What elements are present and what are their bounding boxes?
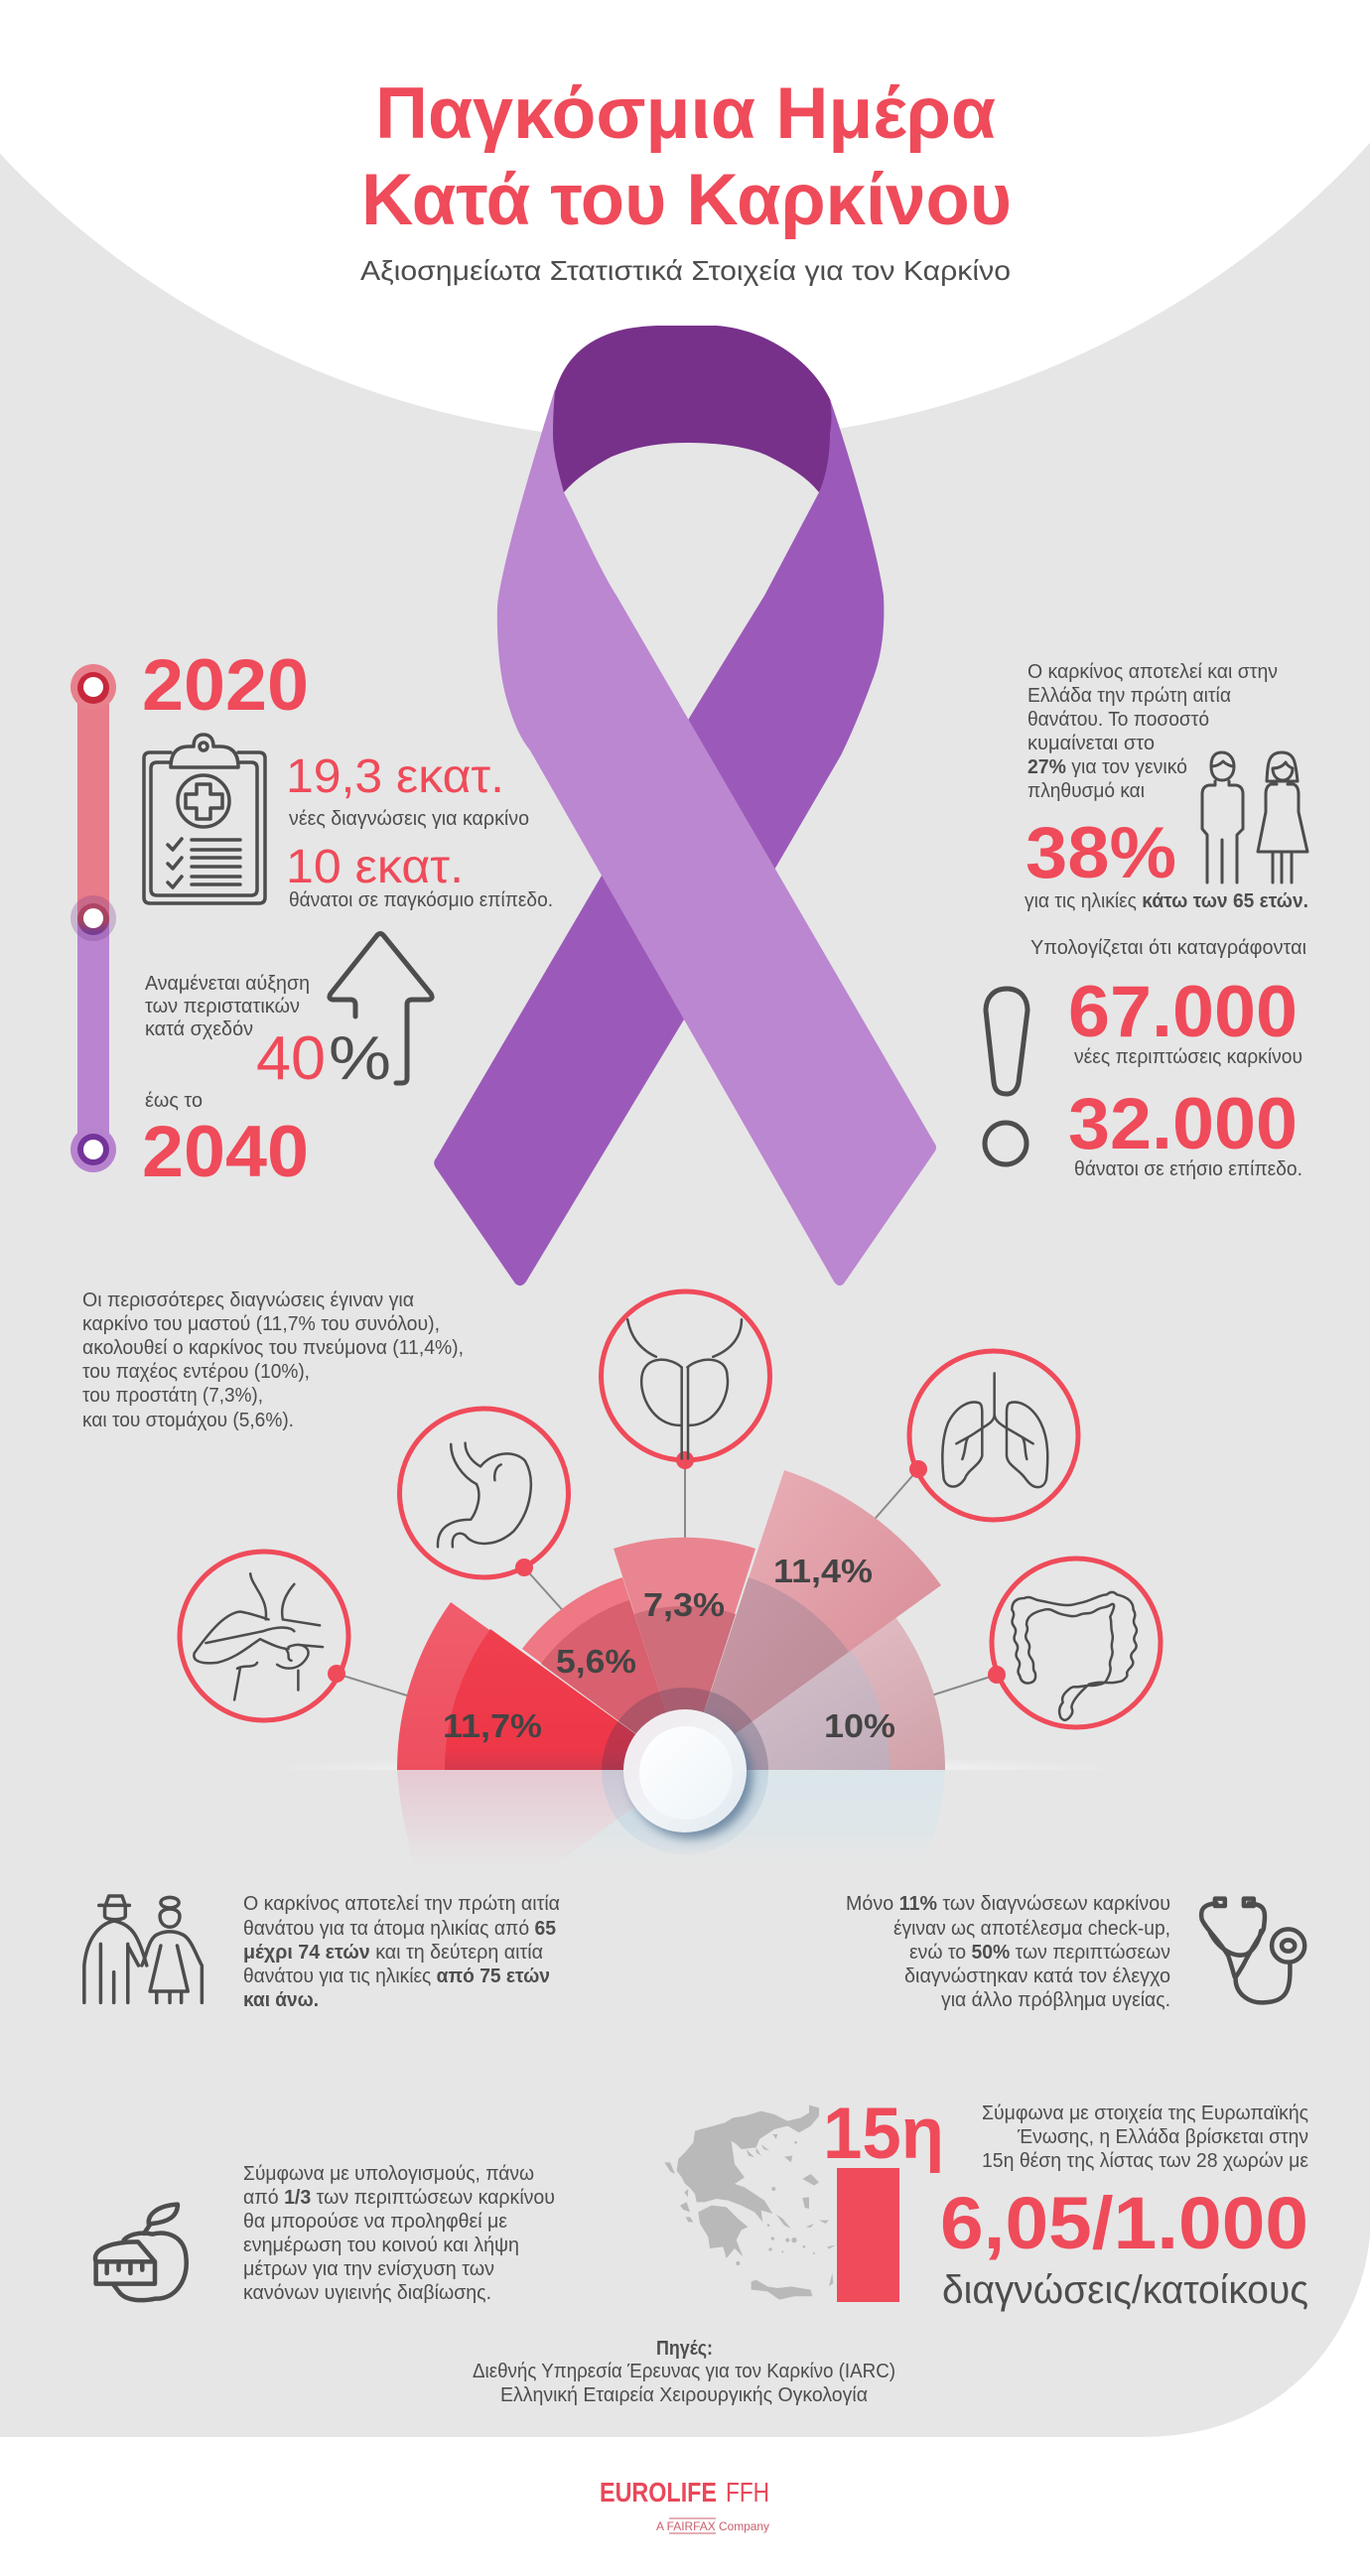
text: one third preventable: από 1/3 των περιπτώσεων καρκίνου [243,2187,555,2209]
text: first cause ages 65-74: Ο καρκίνος αποτελεί την πρώτη αιτία [243,1893,560,1915]
text: expected increase: Αναμένεται αύξηση [145,973,310,995]
title [361,73,1012,240]
stat: 10 million: θάνατοι σε παγκόσμιο επίπεδο. [289,889,553,911]
text: leading cause in Greece: 27% για τον γενικό [1028,756,1187,778]
stat: 19,3 million: νέες διαγνώσεις για καρκίνο [289,808,529,830]
icon: lungs [909,1351,1078,1520]
text: first cause ages 65-74: θανάτου για τα άτομα ηλικίας από 65 [243,1918,556,1940]
sources [473,2338,895,2406]
stat: 10 million [286,841,553,911]
sources: Διεθνής Υπηρεσία Έρευνας για τον Καρκίνο (IARC) [473,2361,895,2382]
sector: prostate 7,3% [614,1538,755,1770]
stat: 40 percent [256,1024,391,1093]
connector lines [337,1460,997,1696]
logo: Eurolife FFH: EUROLIFE [600,2477,717,2508]
stat: 6,05/1.000: 6,05/1.000 [940,2182,1308,2264]
text: one third preventable: κανόνων υγιεινής διαβίωσης. [243,2282,491,2304]
text: check-up share: για άλλο πρόβλημα υγείας. [941,1989,1170,2011]
fan reflection [397,1770,945,1866]
stat: 32.000: θάνατοι σε ετήσιο επίπεδο. [1074,1158,1302,1180]
text: until: έως το [145,1090,203,1112]
text: one third preventable: ενημέρωση του κοινού και λήψη [243,2235,519,2256]
text: most diagnoses: του προστάτη (7,3%), [82,1385,263,1407]
percent labels: 5,6% [556,1643,636,1680]
sector: lung 11,4% [685,1470,941,1770]
panel: check-up [846,1893,1304,2011]
percent labels: 11,7% [443,1707,542,1744]
text: one third preventable: θα μπορούσε να προληφθεί με [243,2211,507,2233]
year 2040: 2040 [142,1112,309,1192]
text: first cause ages 65-74: θανάτου για τις ηλικίες από 75 ετών [243,1966,550,1987]
text: leading cause in Greece: πληθυσμό και [1028,780,1145,802]
text: most diagnoses: καρκίνο του μαστού (11,7% του συνόλου), [82,1313,440,1335]
map of Greece [664,2105,836,2300]
text: check-up share [846,1893,1170,2011]
centre ring [602,1688,768,1854]
text: EU ranking: 15η θέση της λίστας των 28 χωρών με [982,2150,1308,2172]
logo: Eurolife FFH: FFH [726,2477,769,2508]
sector: stomach 5,6% [522,1577,685,1770]
stat: 67.000: νέες περιπτώσεις καρκίνου [1074,1046,1302,1068]
text: check-up share: Μόνο 11% των διαγνώσεων καρκίνου [846,1893,1170,1915]
panel: Greece mortality [1025,661,1308,912]
text: estimated: Υπολογίζεται ότι καταγράφονται [1030,937,1306,959]
text: expected increase: κατά σχεδόν [145,1018,253,1040]
logo: Eurolife FFH [600,2477,769,2533]
icon: up arrow [330,933,432,1083]
text: most diagnoses: και του στομάχου (5,6%). [82,1410,294,1431]
panel: timeline 2020-2040 [70,645,553,1192]
subtitle: Αξιοσημείωτα Στατιστικά Στοιχεία για τον Καρκίνο [360,255,1011,286]
percent labels: 10% [824,1707,895,1744]
text: expected increase [145,973,310,1040]
icon: man and woman [1202,752,1307,882]
icon: stethoscope [1201,1899,1304,2002]
text: leading cause in Greece: κυμαίνεται στο [1028,733,1155,754]
text: leading cause in Greece: θανάτου. Το ποσοστό [1028,709,1209,731]
logo: Eurolife FFH: A FAIRFAX Company [656,2519,769,2533]
text: one third preventable: μέτρων για την ενίσχυση των [243,2258,494,2280]
icon: clipboard [144,735,265,903]
text: under 65: για τις ηλικίες κάτω των 65 ετών. [1025,890,1308,912]
text: check-up share: ενώ το 50% των περιπτώσεων [909,1942,1170,1964]
timeline marker 2040 [70,1127,116,1172]
text: leading cause in Greece: Ελλάδα την πρώτη αιτία [1028,685,1231,707]
stat: 38 percent: 38% [1026,813,1176,893]
stat: 32.000: 32.000 [1068,1084,1298,1164]
panel: prevention [95,2163,555,2304]
year 2020: 2020 [142,645,309,726]
sector: colon 10% [685,1617,945,1770]
timeline bar [77,687,109,1150]
icon: exclamation mark [985,989,1028,1164]
icon: colon [988,1559,1161,1727]
text: expected increase: των περιστατικών [145,996,300,1017]
purple awareness ribbon [434,326,936,1286]
text: EU ranking: Σύμφωνα με στοιχεία της Ευρωπαϊκής [982,2102,1308,2124]
text: first cause ages 65-74: μέχρι 74 ετών και τη δεύτερη αιτία [243,1942,543,1964]
stat: 10 million: 10 εκατ. [286,841,464,893]
title: Κατά του Καρκίνου [361,160,1012,240]
percent labels [443,1553,895,1744]
text: most diagnoses: του παχέος εντέρου (10%), [82,1361,310,1383]
stat: 15th: 15η [823,2094,944,2174]
text: EU ranking: Ένωσης, η Ελλάδα βρίσκεται στην [1017,2126,1308,2148]
stat: 19,3 million [286,750,529,830]
sources: Ελληνική Εταιρεία Χειρουργικής Ογκολογία [500,2384,868,2406]
text: leading cause in Greece [1028,661,1278,802]
stat: 19,3 million: 19,3 εκατ. [286,750,504,803]
panel: yearly cases [985,937,1306,1180]
text: most diagnoses: Οι περισσότερες διαγνώσεις έγιναν για [82,1289,414,1311]
horizon shine [945,1767,967,1770]
text: diagnoses per inhabitants: διαγνώσεις/κατοίκους [942,2268,1308,2312]
rank bar [837,2168,899,2302]
icon: stomach [399,1409,568,1577]
text: one third preventable: Σύμφωνα με υπολογισμούς, πάνω [243,2163,534,2185]
sources: Πηγές: [656,2338,713,2360]
text: one third preventable [243,2163,555,2304]
stat: 40 percent: 40 [256,1024,326,1093]
stat: 67.000: 67.000 [1068,972,1298,1052]
icon: elderly couple [84,1896,202,2002]
panel: elderly [84,1893,560,2011]
percent labels: 7,3% [643,1586,725,1623]
percent labels: 11,4% [773,1553,873,1589]
text: check-up share: έγιναν ως αποτέλεσμα check-up, [893,1918,1170,1940]
stat: 40 percent: % [329,1024,391,1093]
text: check-up share: διαγνώστηκαν κατά τον έλεγχο [904,1966,1170,1987]
icon: prostate [602,1291,770,1469]
text: first cause ages 65-74: και άνω. [243,1989,319,2011]
icon: apple with measuring tape [95,2205,187,2300]
timeline marker 2020 [70,664,116,710]
sector: breast 11,7% [397,1602,685,1770]
timeline marker middle [70,895,116,941]
text: leading cause in Greece: Ο καρκίνος αποτελεί και στην [1028,661,1278,683]
text: first cause ages 65-74 [243,1893,560,2011]
text: most diagnoses [82,1289,464,1431]
header white ellipse [0,0,1370,442]
centre ball [623,1709,753,1838]
text: EU ranking [982,2102,1308,2172]
title: Παγκόσμια Ημέρα [375,73,996,154]
text: most diagnoses: ακολουθεί ο καρκίνος του πνεύμονα (11,4%), [82,1337,464,1359]
icon: breast [180,1552,348,1720]
chart: cancer type fan [180,1291,1161,1866]
panel: Greece ranking [664,2094,1308,2312]
